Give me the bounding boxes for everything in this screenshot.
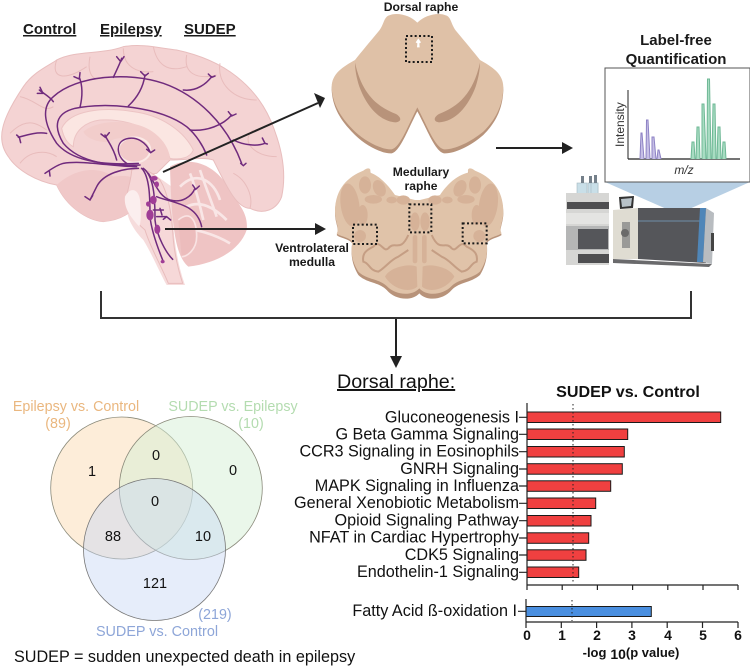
venn counts: 0 — [152, 448, 160, 464]
illustration: dorsal raphe section — [332, 14, 503, 153]
heading: group labels: Epilepsy — [100, 21, 162, 38]
corpus callosum — [62, 110, 193, 159]
brainstem core — [126, 169, 183, 283]
panel: mass spectrum: m/z — [674, 163, 694, 177]
axis tick labels: 5 — [699, 627, 707, 643]
footnote: SUDEP = sudden unexpected death in epilepsy — [14, 648, 356, 666]
venn label: epilepsy vs control: (89) — [45, 416, 71, 432]
brain stem and spinal cord — [127, 167, 185, 285]
solvent bottles — [577, 183, 598, 194]
threshold line — [572, 404, 574, 584]
pathway labels: MAPK Signaling in Influenza — [315, 477, 519, 495]
axes and ticks — [518, 599, 738, 628]
axes and ticks — [519, 403, 738, 590]
bar chart: SUDEP vs. Control pathways — [294, 403, 738, 590]
bracket: combining regions — [101, 291, 691, 318]
venn counts — [88, 448, 237, 592]
arrow: brain to medulla — [165, 223, 326, 235]
heading: dorsal raphe: Dorsal raphe: — [337, 371, 455, 393]
pathway labels: G Beta Gamma Signaling — [335, 426, 519, 444]
axis tick labels: 3 — [628, 627, 636, 643]
venn label: SUDEP vs epilepsy: SUDEP vs. Epilepsy — [168, 399, 298, 415]
illustration: brain with serotonergic projections — [2, 46, 284, 285]
venn counts: 0 — [229, 463, 237, 479]
thalamus — [83, 122, 170, 160]
red bars — [527, 412, 721, 578]
axis title: 10 — [606, 646, 626, 662]
heading: label-free quantification: Quantification — [626, 51, 726, 68]
venn counts: 0 — [151, 494, 159, 510]
pathway labels: GNRH Signaling — [400, 460, 519, 478]
heading: group labels: Control — [23, 21, 76, 38]
projection cone — [605, 182, 750, 214]
axis tick labels: 4 — [664, 627, 672, 643]
venn counts: 1 — [88, 464, 96, 480]
pathway labels: NFAT in Cardiac Hypertrophy — [309, 528, 520, 546]
panel: mass spectrum: Intensity — [613, 102, 627, 147]
pathway labels: Opioid Signaling Pathway — [335, 512, 520, 530]
illustration: LC-MS instrument — [566, 175, 714, 267]
venn count: 219: (219) — [198, 607, 232, 623]
pathway labels: CDK5 Signaling — [405, 546, 519, 564]
label: ventrolateral medulla: medulla — [289, 255, 335, 269]
pathway labels: Endothelin-1 Signaling — [357, 563, 519, 581]
arrow: brain to dorsal raphe — [163, 93, 325, 172]
purple peaks — [640, 120, 661, 159]
venn label: SUDEP vs control: SUDEP vs. Control — [96, 624, 218, 640]
axis tick labels: 6 — [734, 627, 742, 643]
heading: group labels — [23, 21, 236, 38]
cerebrum — [2, 46, 284, 222]
venn counts: 10 — [195, 529, 211, 545]
green peaks — [691, 79, 726, 159]
arrow: to results — [390, 319, 402, 368]
heading: label-free quantification: Label-free — [640, 32, 712, 49]
axis title: (p value) — [626, 645, 679, 660]
venn diagram — [51, 416, 262, 620]
pathway labels — [294, 408, 520, 581]
axis tick labels: 1 — [558, 627, 566, 643]
axis tick labels: 0 — [523, 627, 531, 643]
venn counts: 121 — [143, 576, 167, 592]
screen — [619, 196, 634, 209]
LC stack — [566, 193, 609, 226]
pathway labels: CCR3 Signaling in Eosinophils — [299, 442, 519, 460]
heading: group labels: SUDEP — [184, 21, 236, 38]
cerebellum — [170, 162, 247, 267]
label: ventrolateral medulla: Ventrolateral — [275, 241, 349, 255]
panel: mass spectrum — [605, 68, 750, 182]
axis tick labels — [523, 627, 742, 643]
venn label: SUDEP vs epilepsy: (10) — [238, 416, 264, 432]
pathway labels: Gluconeogenesis I — [385, 408, 519, 426]
bar chart: fatty acid pathway — [352, 599, 742, 662]
temporal lobe shade — [57, 170, 139, 222]
threshold line — [571, 600, 573, 621]
axis tick labels: 2 — [593, 627, 601, 643]
pathway label: Fatty Acid ß-oxidation I — [352, 602, 517, 620]
mass spectrometer body — [613, 208, 638, 259]
label: medullary raphe: raphe — [405, 179, 438, 193]
raphe nuclei — [146, 176, 165, 263]
venn counts: 88 — [105, 529, 121, 545]
axis title: -log — [583, 645, 606, 660]
pathway labels: General Xenobiotic Metabolism — [294, 494, 519, 512]
blue bar — [526, 606, 651, 616]
chart title: SUDEP vs. Control — [556, 383, 700, 401]
venn label: epilepsy vs control: Epilepsy vs. Control — [13, 399, 139, 415]
serotonergic projections — [17, 57, 267, 262]
label: medullary raphe: Medullary — [393, 165, 449, 179]
brain folds — [10, 47, 277, 208]
illustration: medulla section — [335, 168, 503, 299]
arrow: sections to mass spectrometry — [496, 142, 573, 154]
label: dorsal raphe: Dorsal raphe — [384, 0, 458, 14]
